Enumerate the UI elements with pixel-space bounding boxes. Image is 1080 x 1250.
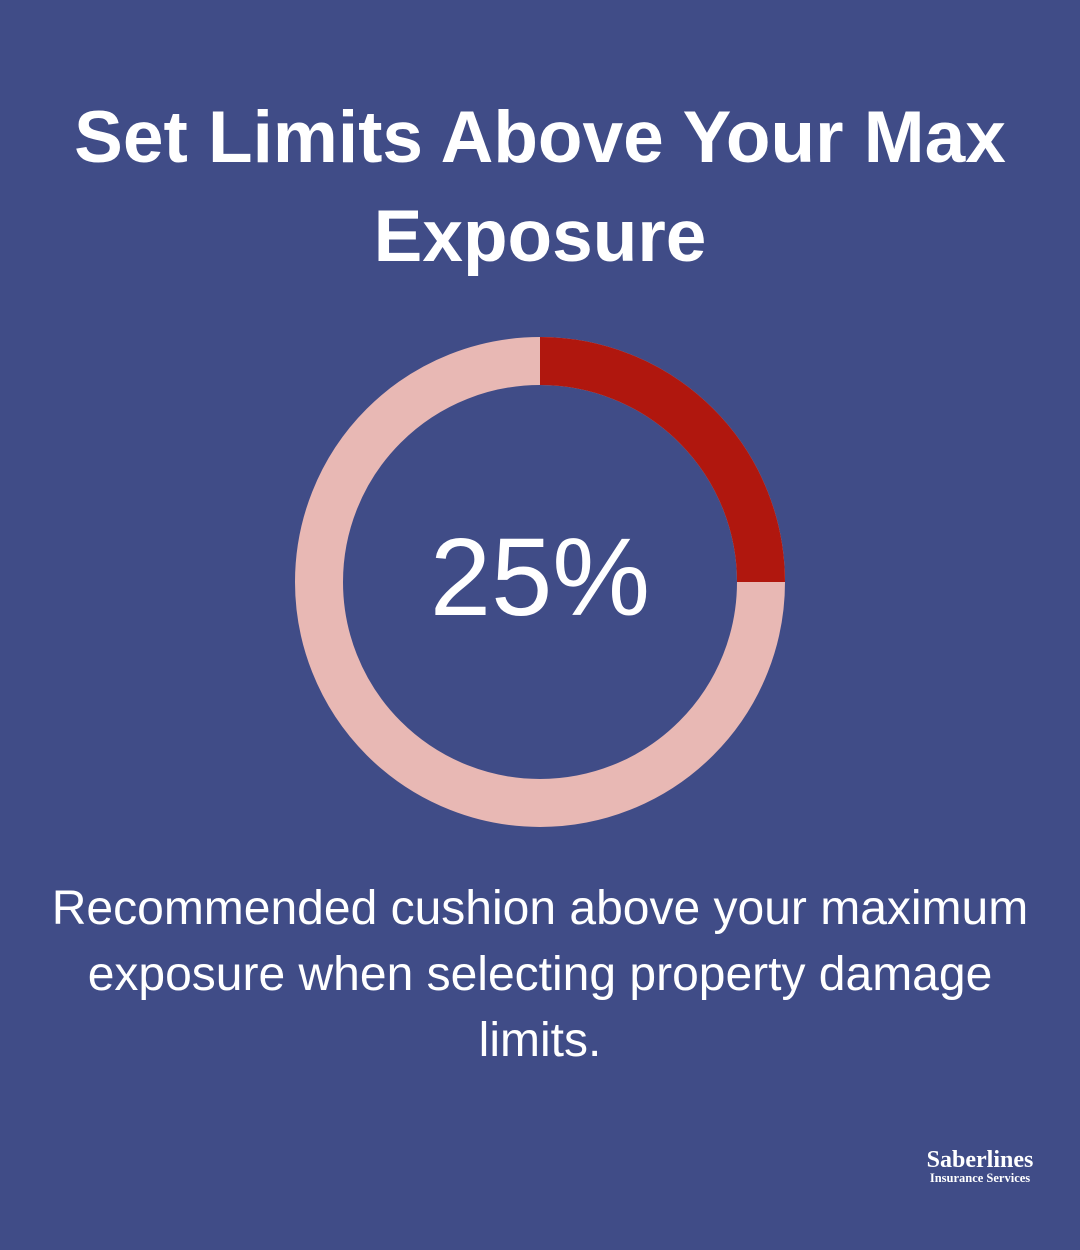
- title: [74, 97, 1006, 277]
- description text: limits.: [479, 1014, 601, 1067]
- logo: Insurance Services: [930, 1171, 1030, 1185]
- logo: Saberlines: [927, 1147, 1033, 1173]
- description text: exposure when selecting property damage: [88, 948, 992, 1001]
- title: Set Limits Above Your Max: [74, 97, 1006, 178]
- description text: Recommended cushion above your maximum: [52, 882, 1028, 935]
- percent value: 25%: [430, 516, 650, 639]
- description text: [52, 882, 1028, 1067]
- logo: [927, 1147, 1033, 1185]
- donut segment 25%: [540, 361, 761, 582]
- title: Exposure: [374, 196, 706, 277]
- donut track: [319, 361, 761, 803]
